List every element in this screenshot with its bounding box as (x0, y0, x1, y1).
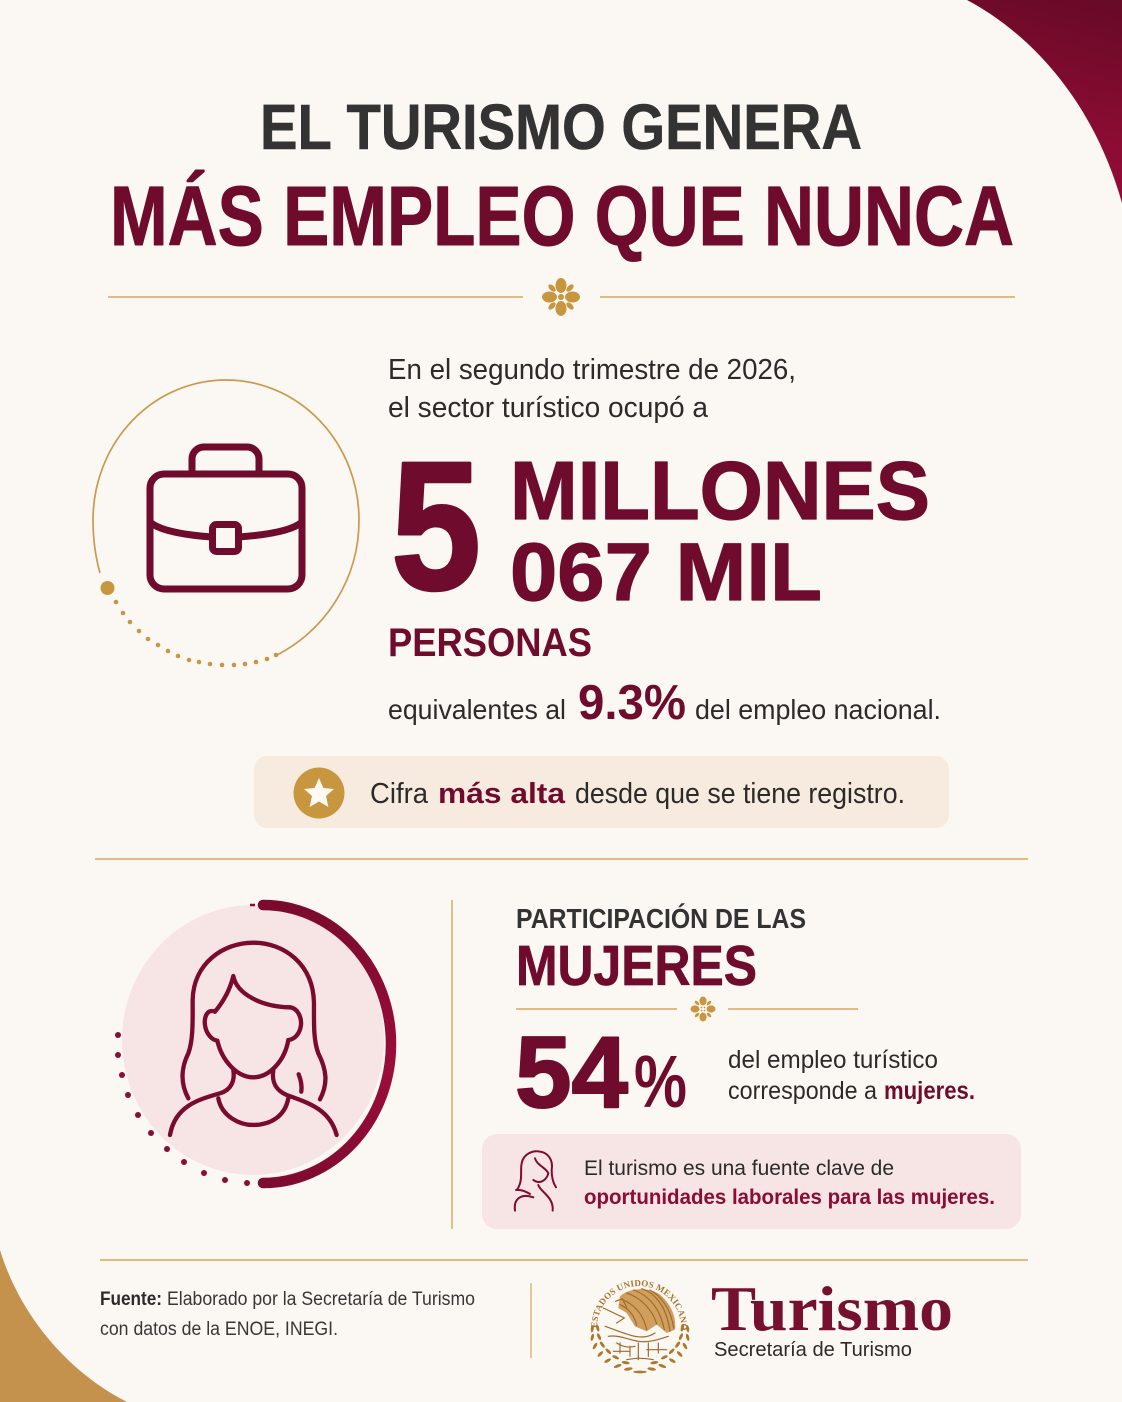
callout text: Cifra (370, 778, 429, 810)
panel: main figure (388, 354, 941, 730)
panel: women's participation (482, 903, 1021, 1229)
number: millones: MILLONES (510, 444, 930, 537)
stat description: corresponde a (728, 1077, 877, 1105)
thin gold ring (93, 380, 359, 655)
logo: national seal (590, 1280, 690, 1374)
dotted ring segment (114, 600, 278, 667)
icon: star badge (294, 768, 344, 818)
icon: woman in progress ring (115, 905, 391, 1186)
stat description (728, 1046, 975, 1105)
briefcase (150, 447, 302, 589)
seal legend: ESTADOS UNIDOS MEXICANOS (591, 1280, 687, 1330)
woman outline (170, 943, 337, 1135)
national share line: 9.3% (578, 676, 686, 730)
stat: 54 percent: % (634, 1040, 687, 1123)
callout text: desde que se tiene registro. (575, 778, 905, 810)
source note: Elaborado por la Secretaría de Turismo (167, 1289, 475, 1310)
icon: small flower ornament (690, 996, 716, 1022)
stat description: del empleo turístico (728, 1046, 938, 1074)
source note: con datos de la ENOE, INEGI. (100, 1319, 338, 1340)
heading large: MUJERES (516, 934, 757, 998)
logo subtitle: Secretaría de Turismo (714, 1339, 912, 1361)
title (110, 91, 1014, 263)
label: personas: PERSONAS (388, 621, 592, 665)
ring start dot (100, 581, 114, 595)
callout text (370, 778, 905, 810)
icon: gold flower ornament (542, 278, 580, 316)
pink disc (122, 905, 384, 1175)
icon: small woman (515, 1151, 556, 1211)
callout text: oportunidades laborales para las mujeres. (584, 1186, 995, 1209)
intro text: En el segundo trimestre de 2026, (388, 354, 796, 386)
eagle and cactus (603, 1289, 675, 1360)
stat: 54 percent (515, 1017, 687, 1129)
callout text: El turismo es una fuente clave de (584, 1157, 894, 1180)
national share line (388, 676, 941, 730)
stat: 54 percent: 54 (515, 1017, 628, 1129)
decorative corner: bottom left (0, 1250, 127, 1402)
stat description: mujeres. (884, 1077, 975, 1105)
number: 067 mil: 067 MIL (510, 527, 822, 618)
national share line: equivalentes al (388, 694, 566, 725)
callout: opportunities (482, 1134, 1021, 1229)
decorative corner: top right (967, 0, 1122, 203)
callout text (584, 1157, 995, 1209)
big number 5: 5 (391, 423, 481, 628)
icon: briefcase in gold ring (93, 380, 359, 667)
callout text: más alta (438, 778, 566, 810)
intro text: el sector turístico ocupó a (388, 392, 709, 424)
laurel wreath (590, 1324, 690, 1373)
national share line: del empleo nacional. (695, 694, 941, 725)
dotted ring segment (115, 1032, 250, 1186)
source note (100, 1289, 475, 1340)
logo: Turismo wordmark: Turismo (711, 1273, 953, 1344)
heading small: PARTICIPACIÓN DE LAS (516, 903, 806, 934)
progress ring 54 percent (263, 905, 391, 1183)
source note: Fuente: (100, 1289, 162, 1310)
title line 1: EL TURISMO GENERA (260, 91, 862, 163)
intro text (388, 354, 796, 424)
callout: highest figure (254, 756, 949, 828)
